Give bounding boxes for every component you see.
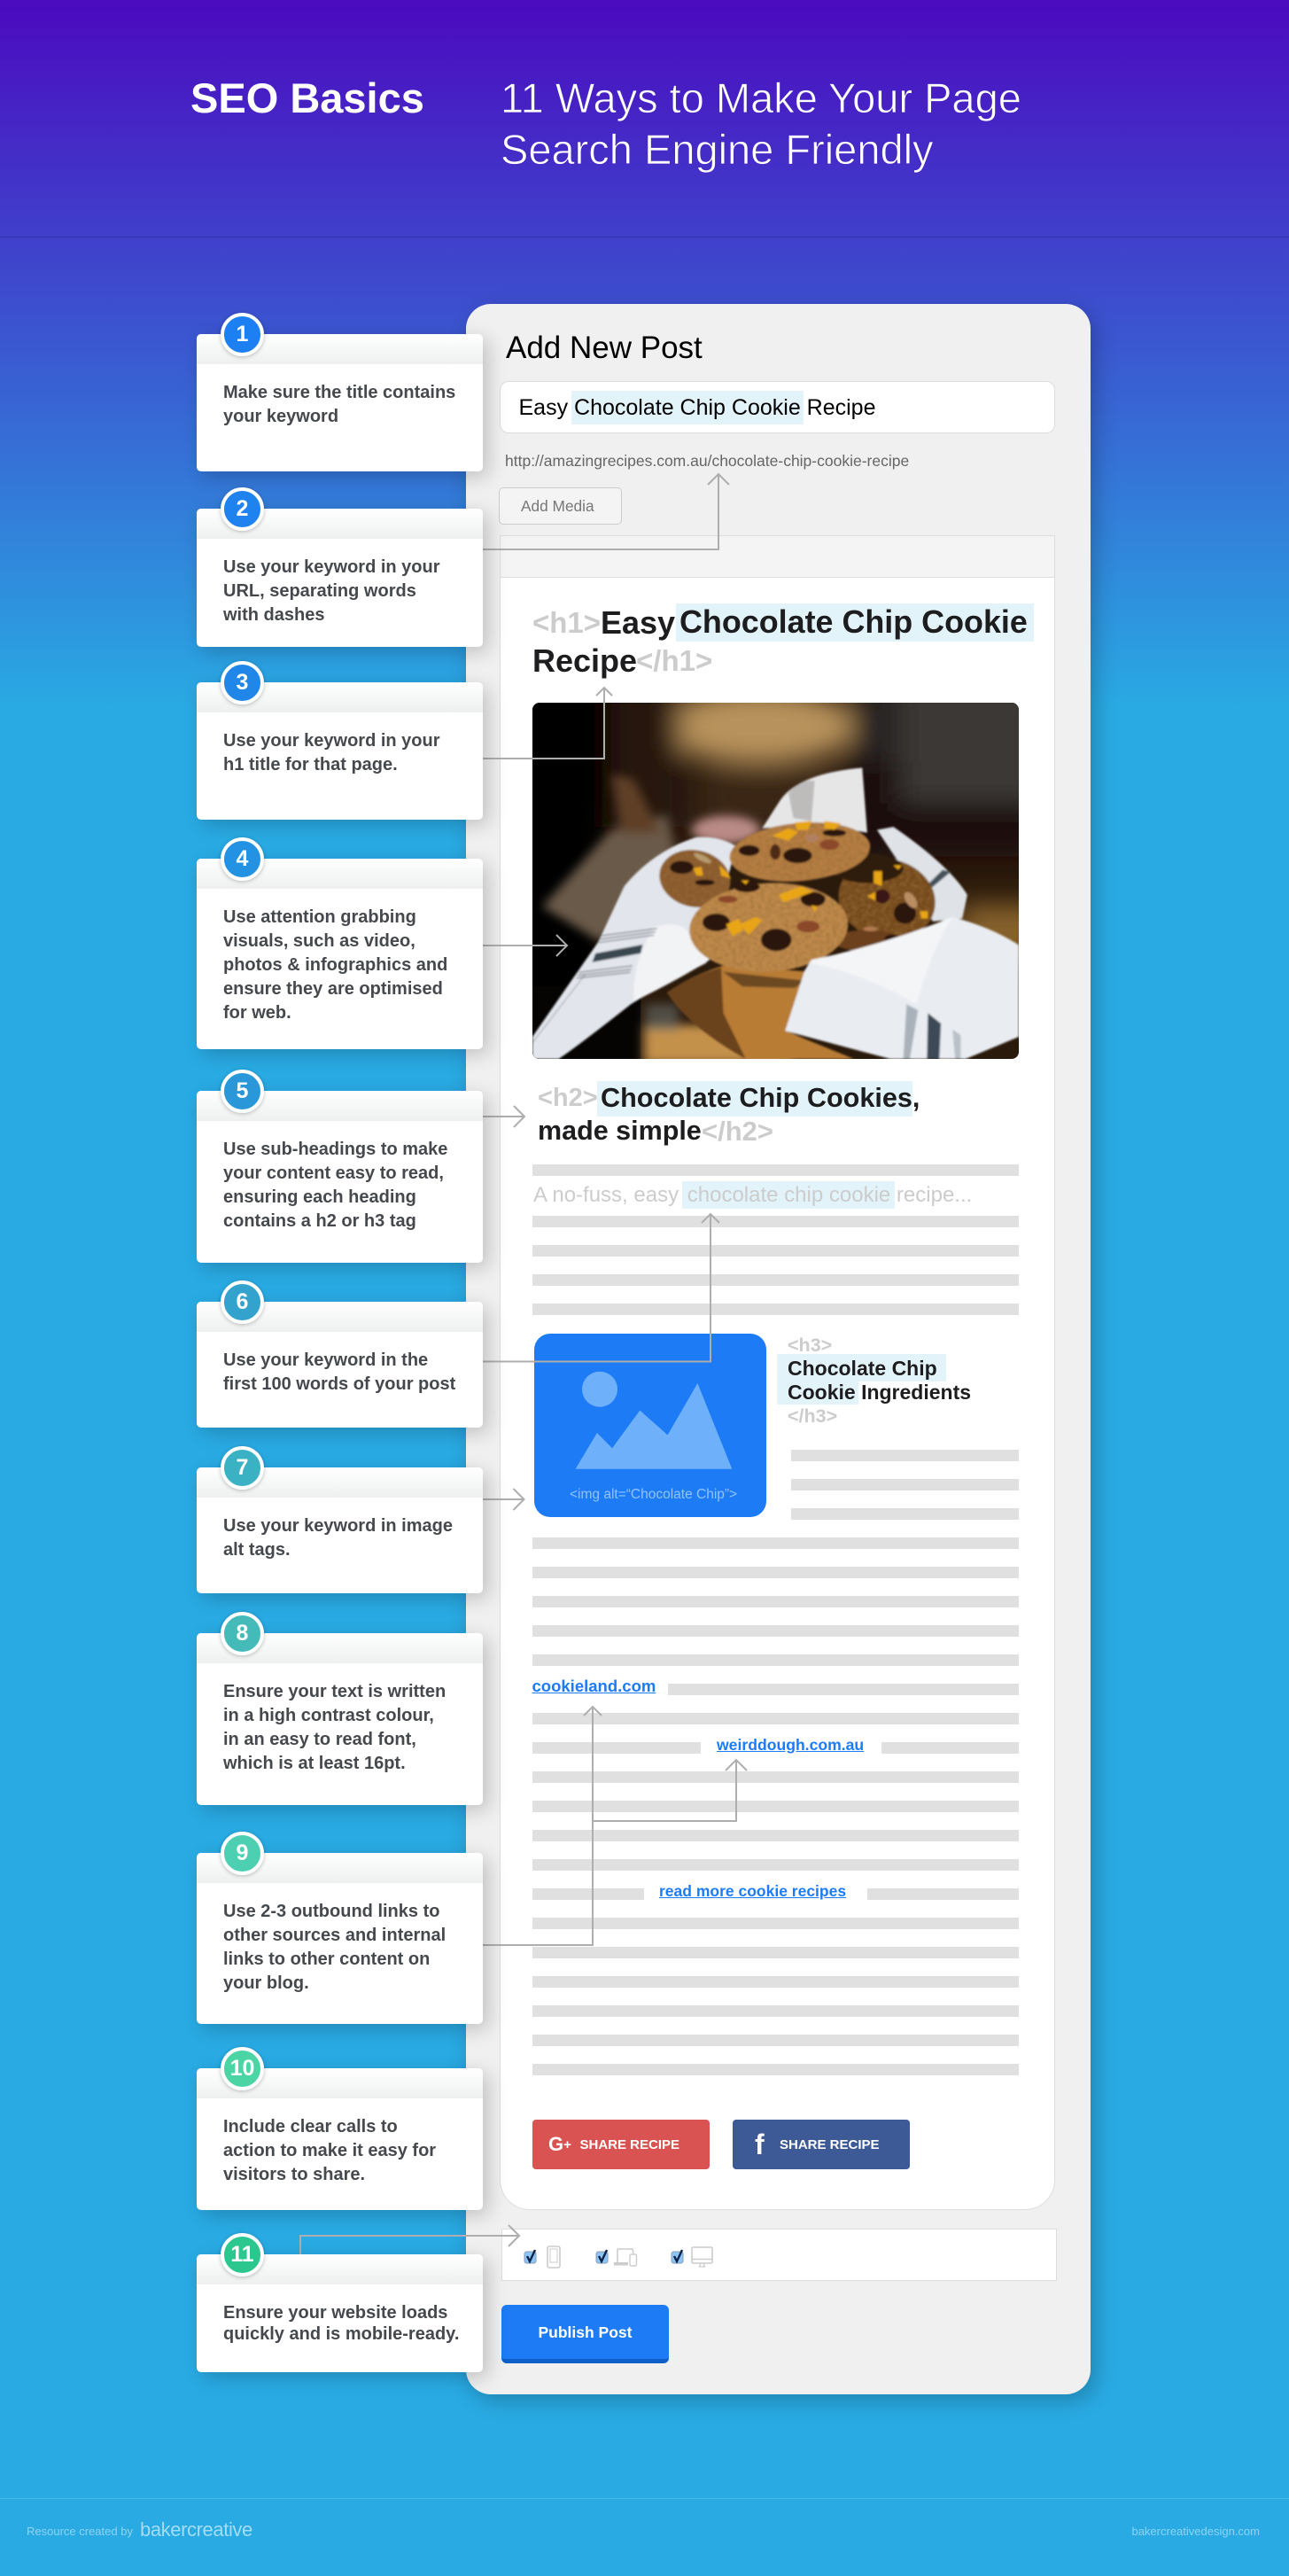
- tip text 11: [223, 2303, 459, 2344]
- napkin right: [785, 917, 1019, 1059]
- tip text 11: Ensure your website loads: [223, 2303, 447, 2323]
- number badge 4: 4: [237, 846, 248, 871]
- number badge 11: [221, 2233, 264, 2276]
- link: weirddough.com.au: weirddough.com.au: [717, 1736, 864, 1754]
- tip text 8: in an easy to read font,: [223, 1730, 416, 1749]
- tip text 10: visitors to share.: [223, 2164, 365, 2183]
- arrow: tip 7 to image alt: [483, 1489, 524, 1510]
- number badge 8: 8: [237, 1621, 248, 1646]
- card 6: [197, 1302, 483, 1428]
- label: SHARE RECIPE: [579, 2137, 679, 2152]
- label: SHARE RECIPE: [780, 2137, 880, 2152]
- number badge 1: [221, 312, 264, 356]
- h3 heading: Cookie Ingredients: [788, 1381, 971, 1404]
- tip text 11: quickly and is mobile-ready.: [223, 2324, 459, 2344]
- h1 heading: [532, 603, 1034, 679]
- button: Facebook share: [733, 2120, 909, 2169]
- tip text 1: Make sure the title contains: [223, 383, 455, 402]
- card 11: [197, 2254, 483, 2372]
- arrow: tip 9 to links: [483, 1707, 747, 1945]
- tip text 5: Use sub-headings to make: [223, 1140, 447, 1159]
- arrow: tip 3 to h1: [483, 688, 612, 759]
- napkin left: [532, 837, 736, 1059]
- h1 heading: Chocolate Chip Cookie: [679, 604, 1028, 640]
- card 10: [197, 2068, 483, 2210]
- tip text 9: links to other content on: [223, 1950, 430, 1969]
- bowl: [667, 966, 854, 1059]
- h1 heading: </h1>: [636, 644, 712, 677]
- h1 heading: Easy: [601, 604, 675, 641]
- subtitle: 11 Ways to Make Your Page: [501, 74, 1021, 121]
- tip text 4: [223, 907, 447, 1023]
- footer: [0, 2498, 1289, 2576]
- tip text 4: for web.: [223, 1003, 291, 1023]
- editor toolbar: [500, 535, 1054, 578]
- number badge 4: [221, 837, 264, 881]
- card 2: [197, 509, 483, 647]
- number badge 5: 5: [237, 1078, 248, 1103]
- heading: Add New Post: Add New Post: [506, 331, 703, 365]
- number badge 11: 11: [230, 2242, 254, 2267]
- card 9: [197, 1852, 483, 2024]
- number badge 9: [221, 1831, 264, 1875]
- tip text 10: [223, 2116, 436, 2183]
- card 3: [197, 682, 483, 820]
- tip text 4: photos & infographics and: [223, 955, 447, 975]
- url text: http://amazingrecipes.com.au/chocolate-chip-cookie-recipe: [505, 452, 909, 470]
- tip text 5: ensuring each heading: [223, 1187, 416, 1207]
- card 8: [197, 1633, 483, 1804]
- tip text 2: Use your keyword in your: [223, 556, 440, 576]
- h2 heading: made simple: [538, 1116, 702, 1146]
- subtitle: [501, 74, 1021, 174]
- chocolate chips: [670, 829, 916, 951]
- tip text 2: with dashes: [223, 604, 324, 624]
- credit text: Resource created by: [27, 2525, 133, 2538]
- number badge 3: [221, 661, 264, 704]
- tip text 7: alt tags.: [223, 1540, 291, 1560]
- panel: editor content: [500, 577, 1054, 2210]
- tip text 5: your content easy to read,: [223, 1163, 444, 1183]
- tip text 6: [223, 1350, 455, 1394]
- title input box: Easy Chocolate Chip Cookie Recipe: [519, 395, 875, 420]
- number badge 10: [221, 2047, 264, 2090]
- h2 heading: Chocolate Chip Cookies,: [601, 1083, 920, 1113]
- tip text 2: URL, separating words: [223, 581, 416, 601]
- arrow: tip 4 to photo: [483, 935, 567, 956]
- number badge 6: [221, 1280, 264, 1324]
- tip text 9: other sources and internal: [223, 1925, 446, 1944]
- tip text 5: [223, 1140, 447, 1231]
- intro text line: A no-fuss, easy chocolate chip cookie recipe...: [533, 1183, 972, 1207]
- number badge 2: [221, 487, 264, 530]
- number badge 1: 1: [237, 321, 248, 346]
- h1 heading: <h1>: [532, 606, 601, 639]
- arrow: tip 11 to device options: [300, 2225, 519, 2255]
- tip text 2: [223, 556, 440, 624]
- text placeholder lines: [532, 1164, 1019, 2075]
- title input box: [500, 381, 1054, 433]
- icons: checkboxes and devices: [524, 2245, 713, 2269]
- link: cookieland.com: cookieland.com: [532, 1677, 656, 1695]
- tip text 6: Use your keyword in the: [223, 1350, 428, 1370]
- tip text 8: which is at least 16pt.: [223, 1754, 406, 1773]
- napkin top: [762, 767, 867, 833]
- number badge 6: 6: [237, 1289, 248, 1314]
- number badge 8: [221, 1612, 264, 1655]
- tip text 4: ensure they are optimised: [223, 979, 443, 999]
- cookies: [824, 844, 951, 954]
- h2 heading: [538, 1081, 920, 1147]
- h2 heading: </h2>: [702, 1116, 773, 1147]
- tip text 4: Use attention grabbing: [223, 907, 416, 927]
- number badge 2: 2: [237, 496, 248, 521]
- subtitle: Search Engine Friendly: [501, 126, 934, 173]
- icon: picture placeholder: [576, 1372, 732, 1469]
- button: Publish Post: Publish Post: [539, 2323, 632, 2341]
- tip text 8: Ensure your text is written: [223, 1682, 446, 1701]
- photo: cookies in a bowl: [532, 703, 1019, 1059]
- icon: f: f: [755, 2129, 765, 2160]
- arrow: tip 2 to URL: [483, 474, 729, 549]
- link: read more cookie recipes: read more cookie recipes: [659, 1882, 846, 1900]
- alt text: <img alt=“Chocolate Chip”>: [570, 1487, 737, 1502]
- image placeholder with alt tag: [534, 1334, 766, 1517]
- icon: G+: G+: [548, 2133, 571, 2155]
- tip text 6: first 100 words of your post: [223, 1374, 455, 1394]
- arrow: tip 6 to intro keyword: [483, 1214, 719, 1361]
- arrow: tip 5 to h2: [483, 1106, 524, 1127]
- tip text 8: in a high contrast colour,: [223, 1706, 434, 1725]
- tip text 1: [223, 383, 455, 425]
- tip text 5: contains a h2 or h3 tag: [223, 1211, 416, 1231]
- tip text 10: action to make it easy for: [223, 2141, 436, 2160]
- h2 heading: <h2>: [538, 1084, 598, 1112]
- panel: add new post editor: [466, 304, 1091, 2394]
- h3 heading: [777, 1335, 971, 1427]
- device options row: [501, 2229, 1057, 2281]
- number badge 3: 3: [237, 670, 248, 695]
- number badge 10: 10: [230, 2056, 254, 2081]
- button: Publish Post: [501, 2305, 669, 2363]
- card 5: [197, 1091, 483, 1262]
- website: bakercreativedesign.com: [1131, 2525, 1260, 2538]
- h3 heading: </h3>: [788, 1405, 837, 1427]
- tip text 9: Use 2-3 outbound links to: [223, 1902, 439, 1921]
- card 1: [197, 333, 483, 471]
- tip text 3: [223, 730, 440, 774]
- tip text 4: visuals, such as video,: [223, 931, 415, 951]
- tip text 8: [223, 1682, 446, 1773]
- tip text 9: your blog.: [223, 1973, 309, 1992]
- title: SEO Basics: SEO Basics: [190, 74, 424, 121]
- number badge 9: 9: [237, 1840, 248, 1864]
- tip text 7: Use your keyword in image: [223, 1515, 453, 1535]
- tip text 10: Include clear calls to: [223, 2116, 398, 2136]
- number badge 7: [221, 1446, 264, 1489]
- card 4: [197, 859, 483, 1049]
- button: Google+ share: [532, 2120, 709, 2169]
- h3 heading: Chocolate Chip: [788, 1357, 937, 1380]
- logo: bakercreative: bakercreative: [140, 2518, 252, 2541]
- h3 heading: <h3>: [788, 1335, 832, 1356]
- tip text 1: your keyword: [223, 406, 338, 425]
- h1 heading: Recipe: [532, 642, 637, 679]
- card 7: [197, 1467, 483, 1593]
- tip text 3: h1 title for that page.: [223, 755, 398, 774]
- tip text 3: Use your keyword in your: [223, 730, 440, 750]
- orange zest: [694, 821, 928, 937]
- tip text 9: [223, 1902, 446, 1992]
- add media button: Add Media: [521, 497, 594, 515]
- tip text 7: [223, 1515, 453, 1560]
- number badge 7: 7: [237, 1455, 248, 1480]
- number badge 5: [221, 1070, 264, 1113]
- add media button: [499, 487, 622, 525]
